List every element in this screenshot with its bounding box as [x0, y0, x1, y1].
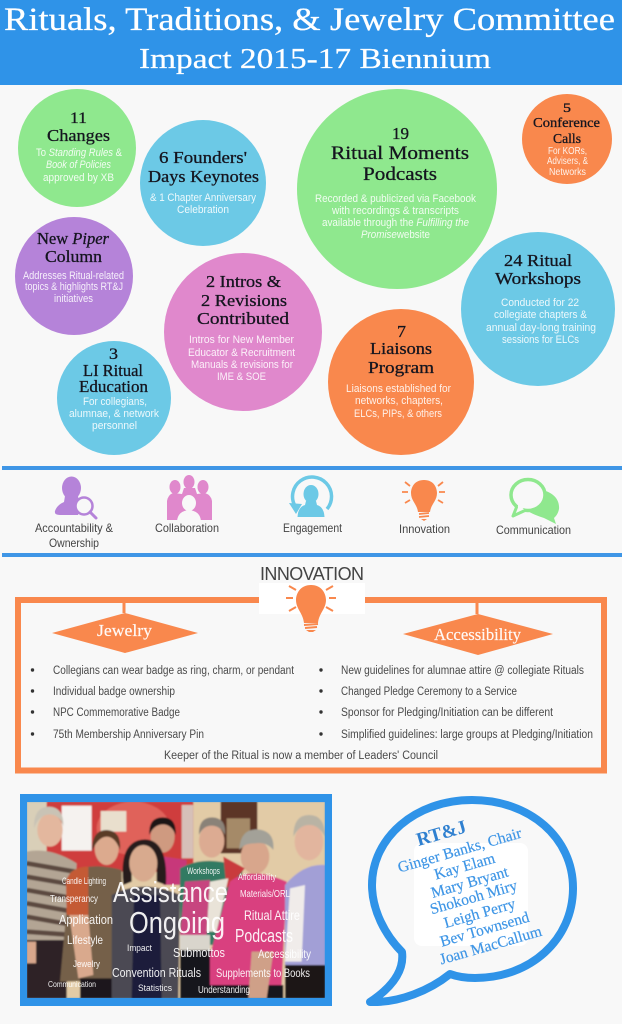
- label: accountability: Ownership: [49, 536, 99, 550]
- circle: ritual moments podcasts: Promisewebsite: [361, 229, 430, 241]
- word cloud: Submottos: [173, 945, 225, 960]
- subtitle: Impact 2015-17 Biennium: [139, 43, 492, 75]
- icon: lightbulb: [402, 480, 445, 521]
- list: jewelry: Individual badge ownership: [53, 686, 175, 698]
- member names: Leigh Perry: [442, 895, 518, 932]
- circle: conference calls: [522, 94, 612, 184]
- circle: new piper column: New Piper: [37, 229, 109, 248]
- circle: liaisons program: Program: [368, 358, 434, 377]
- circle: ritual moments podcasts: [297, 89, 497, 289]
- word cloud: Accessibility: [258, 947, 311, 961]
- word cloud: Statistics: [138, 983, 172, 993]
- circle: new piper column: Addresses Ritual-related: [23, 270, 124, 282]
- heading: innovation: INNOVATION: [260, 564, 364, 584]
- word cloud: Transperancy: [50, 894, 98, 905]
- list: jewelry: 75th Membership Anniversary Pin: [53, 729, 204, 741]
- word cloud: Ritual Attire: [244, 907, 300, 923]
- circle: liaisons program: Liaisons established for: [346, 383, 451, 395]
- circle: founders' days keynotes: Celebration: [177, 204, 229, 216]
- list: jewelry: [31, 665, 295, 741]
- member names: Joan MacCallum: [438, 923, 544, 968]
- circle: LI ritual education: alumnae, & network: [69, 408, 159, 420]
- bubble heading: RT&J: [414, 817, 469, 851]
- header banner: [0, 0, 622, 85]
- icon: innovation lightbulb: [286, 585, 336, 632]
- word cloud: Application: [59, 912, 113, 927]
- circle: ritual moments podcasts: Ritual Moments: [331, 143, 469, 164]
- member names: Kay Elam: [432, 850, 497, 883]
- list: accessibility: [319, 665, 593, 741]
- circle: intros and revisions: 2 Intros &: [206, 272, 281, 291]
- circle: new piper column: topics & highlights RT&J: [25, 281, 123, 293]
- label: accountability: Accountability &: [35, 521, 113, 535]
- list: jewelry: Collegians can wear badge as ring, charm, or pendant: [53, 665, 295, 677]
- circle: new piper column: initiatives: [54, 293, 93, 305]
- note: keeper of the ritual: Keeper of the Ritual is now a member of Leaders' Council: [164, 750, 438, 762]
- circle: ritual moments podcasts: with recordings & transcripts: [331, 205, 459, 217]
- word cloud: Communication: [48, 980, 96, 989]
- member names: Mary Bryant: [429, 863, 511, 902]
- circle: 11 changes: approved by XB: [43, 172, 114, 184]
- circle: new piper column: Column: [45, 247, 103, 266]
- word cloud: Jewelry: [73, 959, 100, 969]
- circle: conference calls: Calls: [553, 132, 581, 147]
- word cloud: [48, 866, 311, 996]
- member names: Bev Townsend: [438, 909, 532, 951]
- circle: ritual workshops: collegiate chapters &: [494, 309, 588, 321]
- circle: founders' days keynotes: [140, 120, 266, 246]
- word cloud: Convention Rituals: [112, 965, 201, 980]
- label: innovation: Innovation: [399, 522, 450, 536]
- circle: conference calls: For KORs,: [548, 146, 587, 157]
- label: collaboration: Collaboration: [155, 521, 219, 535]
- circle: liaisons program: Liaisons: [370, 339, 432, 358]
- circle: ritual workshops: sessions for ELCs: [502, 334, 579, 346]
- word cloud: Lifestyle: [67, 933, 103, 947]
- circle: liaisons program: 7: [397, 322, 407, 341]
- circle: founders' days keynotes: & 1 Chapter Anniversary: [150, 192, 256, 204]
- circle: intros and revisions: [164, 253, 322, 411]
- photo panel with word cloud: [20, 794, 332, 1006]
- circle: 11 changes: [18, 89, 136, 207]
- frame: [18, 600, 604, 770]
- circle: conference calls: 5: [563, 100, 571, 115]
- circle: ritual workshops: [461, 232, 615, 386]
- circle: founders' days keynotes: Days Keynotes: [148, 167, 259, 186]
- panel: innovation: [18, 564, 604, 770]
- circle: ritual workshops: Workshops: [495, 269, 581, 288]
- circle: 11 changes: To Standing Rules &: [36, 147, 123, 159]
- circle: 11 changes: 11: [70, 110, 87, 127]
- label: accountability: [35, 521, 113, 550]
- word cloud: Impact: [127, 943, 152, 953]
- circle: LI ritual education: For collegians,: [83, 396, 147, 408]
- list: accessibility: Sponsor for Pledging/Initiation can be different: [341, 707, 554, 719]
- label: communication: Communication: [496, 523, 571, 537]
- word cloud: Workshops: [187, 866, 220, 876]
- circle: ritual moments podcasts: Podcasts: [363, 164, 437, 185]
- diamond: jewelry: Jewelry: [97, 621, 153, 640]
- circle: ritual moments podcasts: available through the Fulfilling the: [322, 217, 469, 229]
- circle: intros and revisions: 2 Revisions: [201, 291, 287, 310]
- circle: LI ritual education: Education: [79, 377, 149, 396]
- circle: ritual moments podcasts: Recorded & publicized via Facebook: [315, 193, 476, 205]
- word cloud: Podcasts: [235, 926, 293, 946]
- circle: ritual workshops: 24 Ritual: [504, 251, 572, 270]
- word cloud: Affordability: [238, 872, 276, 882]
- list: accessibility: Simplified guidelines: large groups at Pledging/Initiation: [341, 729, 593, 741]
- icon: collaboration: [167, 475, 212, 521]
- circle: LI ritual education: LI Ritual: [83, 361, 143, 380]
- diamond: accessibility: Accessibility: [434, 625, 521, 644]
- list: accessibility: Changed Pledge Ceremony to a Service: [341, 686, 517, 698]
- word cloud: Understanding: [198, 985, 250, 996]
- circle: new piper column: [15, 217, 133, 335]
- word cloud: Materials/ORL: [240, 889, 290, 900]
- values icon row: [35, 475, 571, 550]
- member names: Ginger Banks, Chair: [396, 825, 524, 876]
- circle: LI ritual education: personnel: [92, 420, 137, 432]
- icon: accountability: [55, 476, 96, 518]
- circle: ritual moments podcasts: 19: [392, 124, 409, 143]
- member names: [396, 825, 544, 968]
- circle: founders' days keynotes: 6 Founders': [159, 148, 247, 167]
- circle: intros and revisions: IME & SOE: [217, 371, 266, 383]
- circle: LI ritual education: 3: [109, 346, 118, 363]
- circle: LI ritual education: [57, 341, 171, 455]
- circle: intros and revisions: Intros for New Member: [189, 334, 294, 346]
- word cloud: Supplements to Books: [216, 966, 310, 980]
- circle: intros and revisions: Educator & Recruitment: [188, 347, 295, 359]
- circle: intros and revisions: Contributed: [197, 309, 290, 328]
- icon: engagement: [289, 477, 332, 517]
- word cloud: Ongoing: [129, 905, 225, 940]
- circle: ritual workshops: annual day-long training: [486, 322, 596, 334]
- circle: conference calls: Conference: [533, 116, 600, 131]
- circle: liaisons program: networks, chapters,: [355, 395, 443, 407]
- word cloud: Assistance: [113, 877, 228, 909]
- diamond: accessibility: [403, 614, 553, 655]
- group photo: [27, 802, 325, 998]
- diamond: jewelry: [52, 613, 198, 653]
- circle: conference calls: Advisers, &: [547, 156, 588, 167]
- member names: Shokooh Miry: [428, 877, 520, 918]
- list: accessibility: New guidelines for alumnae attire @ collegiate Rituals: [341, 665, 584, 677]
- circle: 11 changes: Book of Policies: [46, 159, 111, 171]
- circle: liaisons program: [328, 309, 474, 455]
- icon: communication: [511, 480, 559, 524]
- list: jewelry: NPC Commemorative Badge: [53, 707, 180, 719]
- circle: 11 changes: Changes: [47, 126, 110, 145]
- circle: conference calls: Networks: [549, 167, 586, 178]
- title: Rituals, Traditions, & Jewelry Committee: [4, 2, 615, 38]
- speech bubble: RT&J members: [370, 800, 573, 1002]
- circle: intros and revisions: Manuals & revisions for: [191, 359, 293, 371]
- circle: ritual workshops: Conducted for 22: [501, 297, 579, 309]
- word cloud: Candle Lighting: [62, 876, 106, 886]
- label: engagement: Engagement: [283, 521, 343, 535]
- circle: liaisons program: ELCs, PIPs, & others: [354, 408, 442, 420]
